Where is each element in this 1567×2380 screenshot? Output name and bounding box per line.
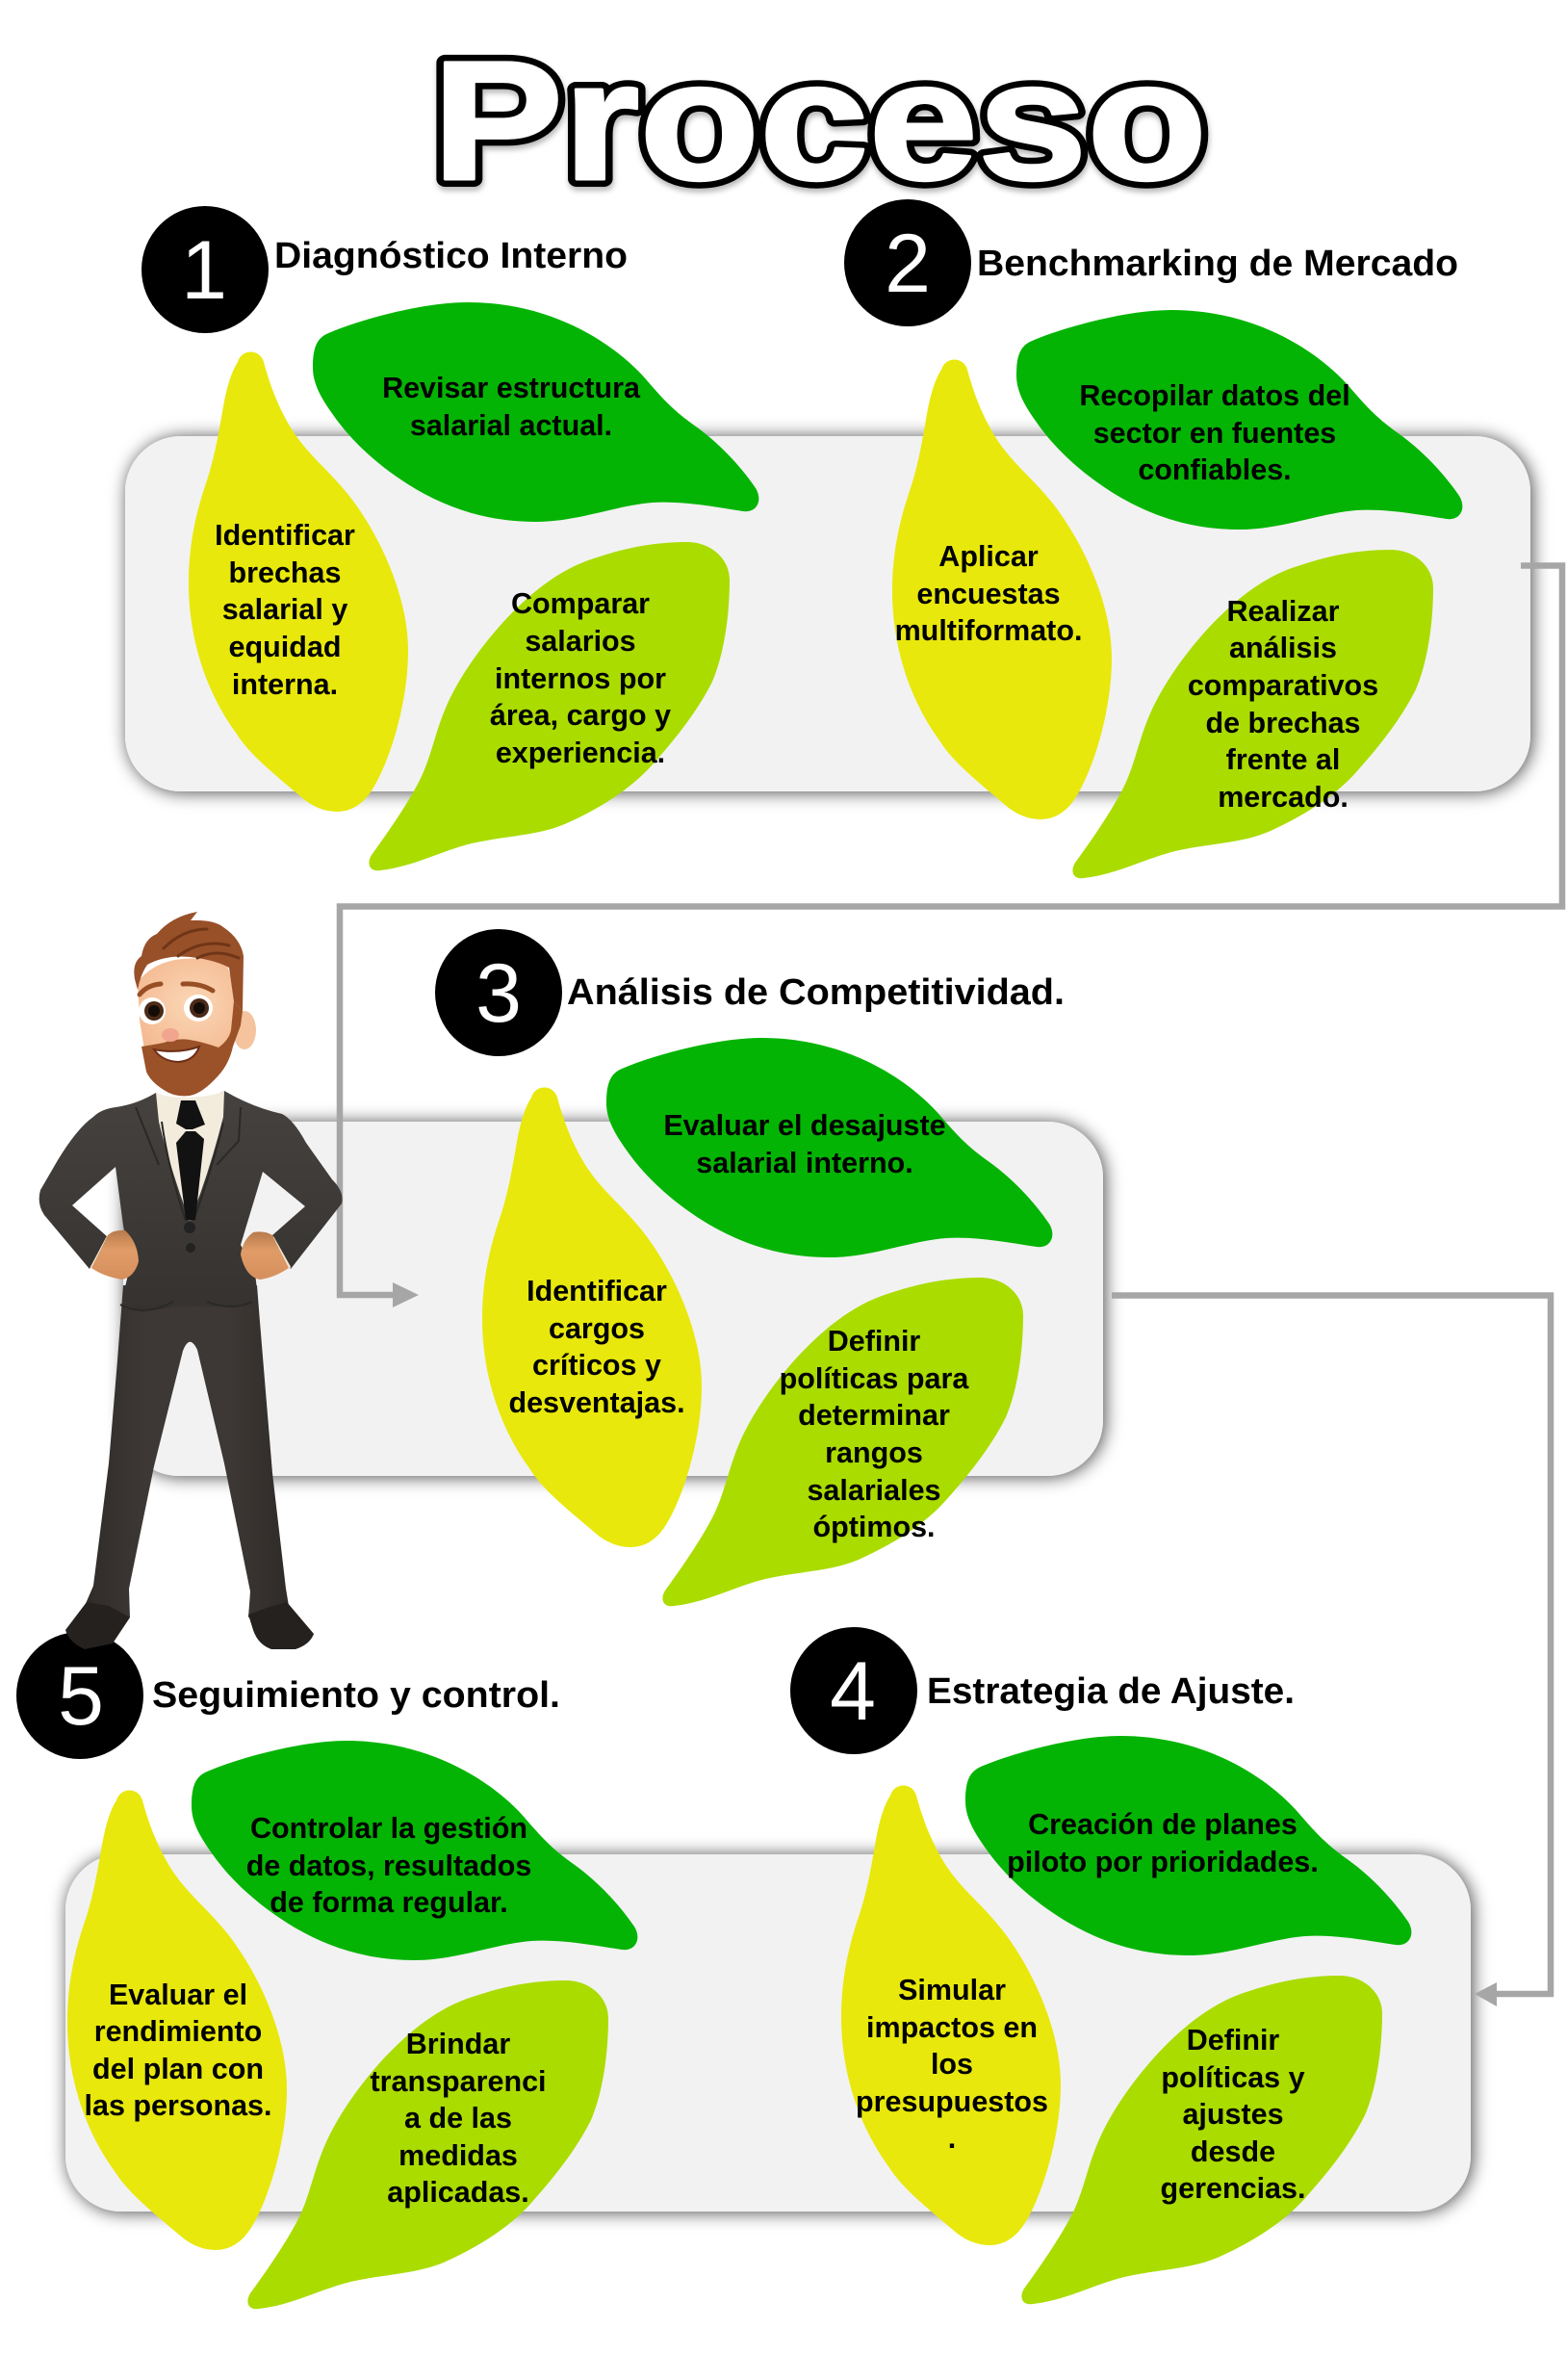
leaf: yellow: encuestas <box>916 578 1061 610</box>
leaf: dark green: Controlar la gestión <box>250 1812 527 1845</box>
step 5 <box>16 1632 637 2309</box>
leaf: lime: a de las <box>404 2102 512 2134</box>
leaf: yellow <box>482 1088 702 1547</box>
leaf: lime: área, cargo y <box>490 699 671 732</box>
heading 2: Benchmarking de Mercado <box>977 244 1458 284</box>
leaf: lime: Definir <box>828 1325 920 1358</box>
leaf: dark green: de datos, resultados <box>246 1850 531 1882</box>
number badge 1 <box>141 206 269 333</box>
leaf: lime <box>247 1980 608 2309</box>
leaf: lime: análisis <box>1229 632 1337 664</box>
leaf: yellow: brechas <box>229 556 341 589</box>
leaf: lime: medidas <box>398 2139 518 2172</box>
title: Proceso <box>432 27 1207 216</box>
number badge 2 <box>844 199 971 326</box>
leaf: lime: ajustes <box>1182 2098 1284 2131</box>
heading 1: Diagnóstico Interno <box>274 236 628 276</box>
leaf: dark green <box>965 1736 1411 1955</box>
leaf: yellow <box>67 1791 287 2250</box>
leaf: yellow: rendimiento <box>94 2015 262 2048</box>
leaf: yellow: interna. <box>232 668 338 701</box>
leaf: lime: internos por <box>495 662 666 695</box>
leaf: dark green: sector en fuentes <box>1093 417 1336 450</box>
number badge 5 <box>16 1632 143 1759</box>
leaf: lime: Comparar <box>511 587 650 620</box>
heading 3: Análisis de Competitividad. <box>567 972 1065 1013</box>
leaf: dark green <box>313 302 758 522</box>
step 1 <box>141 206 758 870</box>
buttons <box>184 1222 195 1253</box>
leaf: yellow: Identificar <box>527 1275 667 1307</box>
leaf: yellow: presupuestos <box>856 2085 1048 2118</box>
leaves 5 <box>67 1741 637 2309</box>
leaf: lime: gerencias. <box>1161 2172 1305 2205</box>
leaf: dark green <box>192 1741 637 1960</box>
leaf: dark green <box>606 1038 1052 1257</box>
leaf: yellow: salarial y <box>222 593 347 626</box>
leaf: lime: transparenci <box>370 2065 547 2098</box>
panel: steps 1 and 2 background <box>125 436 1530 791</box>
right hand <box>241 1231 289 1280</box>
leaf: lime <box>1021 1976 1382 2304</box>
number badge 3 <box>435 929 562 1056</box>
right shoe <box>248 1602 314 1649</box>
jacket <box>39 1091 343 1312</box>
step 2 <box>844 199 1462 878</box>
leaf: yellow: los <box>931 2048 973 2081</box>
leaf: yellow: las personas. <box>85 2089 271 2122</box>
character: businessman <box>39 912 343 1649</box>
leaf: lime: Realizar <box>1227 595 1340 628</box>
step 4 <box>790 1627 1411 2304</box>
heading 4: Estrategia de Ajuste. <box>927 1671 1295 1712</box>
leaf: yellow: equidad <box>229 631 341 663</box>
leaf: dark green: confiables. <box>1138 453 1292 486</box>
leaf: yellow: desventajas. <box>508 1386 685 1419</box>
leaf: lime: políticas para <box>780 1362 969 1395</box>
nose <box>162 1028 179 1042</box>
leaf: lime <box>1072 550 1433 878</box>
leaf: dark green: de forma regular. <box>270 1886 508 1919</box>
eyes <box>139 995 213 1024</box>
leaves 2 <box>892 310 1462 878</box>
leaf: lime: comparativos <box>1188 669 1378 702</box>
leaf: lime: determinar <box>798 1399 950 1432</box>
leaf: yellow <box>841 1785 1061 2245</box>
ear <box>233 1011 256 1049</box>
leaf: yellow: Identificar <box>215 519 355 552</box>
hair strands <box>164 929 239 958</box>
left hand <box>91 1230 139 1280</box>
leaf: lime: desde <box>1191 2135 1275 2168</box>
leaf: dark green: piloto por prioridades. <box>1007 1846 1319 1878</box>
leaf: lime: de brechas <box>1205 707 1361 739</box>
leaf: yellow <box>892 360 1112 819</box>
number badge 4 <box>790 1627 917 1754</box>
leaves 3 <box>482 1038 1052 1606</box>
leaf: lime: aplicadas. <box>387 2176 529 2209</box>
leaf: lime: mercado. <box>1218 781 1349 814</box>
leaf: yellow: Simular <box>898 1974 1006 2006</box>
panel: steps 4 and 5 background <box>65 1854 1471 2212</box>
number badge 5: 5 <box>58 1650 104 1743</box>
number badge 4: 4 <box>830 1645 876 1738</box>
leaf: lime: rangos <box>825 1436 923 1469</box>
leaf: lime: Brindar <box>406 2028 510 2060</box>
arrow: from step 3 to step 4 <box>1112 1296 1551 2006</box>
leaf: lime: Definir <box>1187 2024 1279 2057</box>
arrow: from steps 1-2 to step 3 <box>340 566 1562 1307</box>
lapels <box>120 1107 252 1310</box>
title: Proceso <box>432 27 1207 216</box>
leaf: lime <box>369 542 730 870</box>
shirt <box>156 1091 224 1221</box>
trousers <box>85 1285 289 1617</box>
leaf: dark green: salarial actual. <box>410 409 612 442</box>
step 3 <box>435 929 1065 1606</box>
leaf: yellow: . <box>948 2122 956 2155</box>
leaf: dark green: salarial interno. <box>696 1147 913 1179</box>
leaf: yellow <box>189 352 408 812</box>
leaf: yellow: multiformato. <box>895 614 1082 647</box>
leaf: lime: óptimos. <box>812 1511 936 1543</box>
leaf: lime: salariales <box>807 1474 941 1507</box>
face <box>138 959 239 1049</box>
leaf: lime: experiencia. <box>496 737 665 769</box>
leaf: lime: salarios <box>525 625 636 658</box>
number badge 1: 1 <box>181 224 227 317</box>
beard <box>141 1001 243 1096</box>
leaf: lime: frente al <box>1226 743 1340 776</box>
leaf: yellow: del plan con <box>92 2053 264 2085</box>
panel: step 3 background <box>123 1122 1103 1476</box>
mouth <box>154 1047 199 1062</box>
leaf: dark green: Creación de planes <box>1028 1808 1297 1841</box>
leaf: yellow: Aplicar <box>938 540 1039 573</box>
hair <box>134 912 244 1011</box>
leaf: dark green: Recopilar datos del <box>1079 379 1350 412</box>
number badge 3: 3 <box>475 947 522 1040</box>
leaf: yellow: impactos en <box>866 2011 1038 2044</box>
cuffs <box>91 1237 290 1268</box>
leaf: dark green <box>1016 310 1462 530</box>
leaf: dark green: Revisar estructura <box>382 372 641 404</box>
leaves 4 <box>841 1736 1411 2304</box>
leaf: yellow: cargos <box>549 1312 645 1345</box>
tie <box>176 1100 205 1220</box>
leaf: lime: políticas y <box>1161 2061 1305 2094</box>
eyebrows <box>140 984 213 995</box>
number badge 2: 2 <box>885 218 931 310</box>
leaf: yellow: Evaluar el <box>109 1979 247 2011</box>
leaf: yellow: críticos y <box>532 1349 661 1382</box>
leaf: lime <box>662 1278 1023 1606</box>
left shoe <box>65 1602 130 1649</box>
leaf: dark green: Evaluar el desajuste <box>663 1109 946 1142</box>
heading 5: Seguimiento y control. <box>152 1675 560 1716</box>
